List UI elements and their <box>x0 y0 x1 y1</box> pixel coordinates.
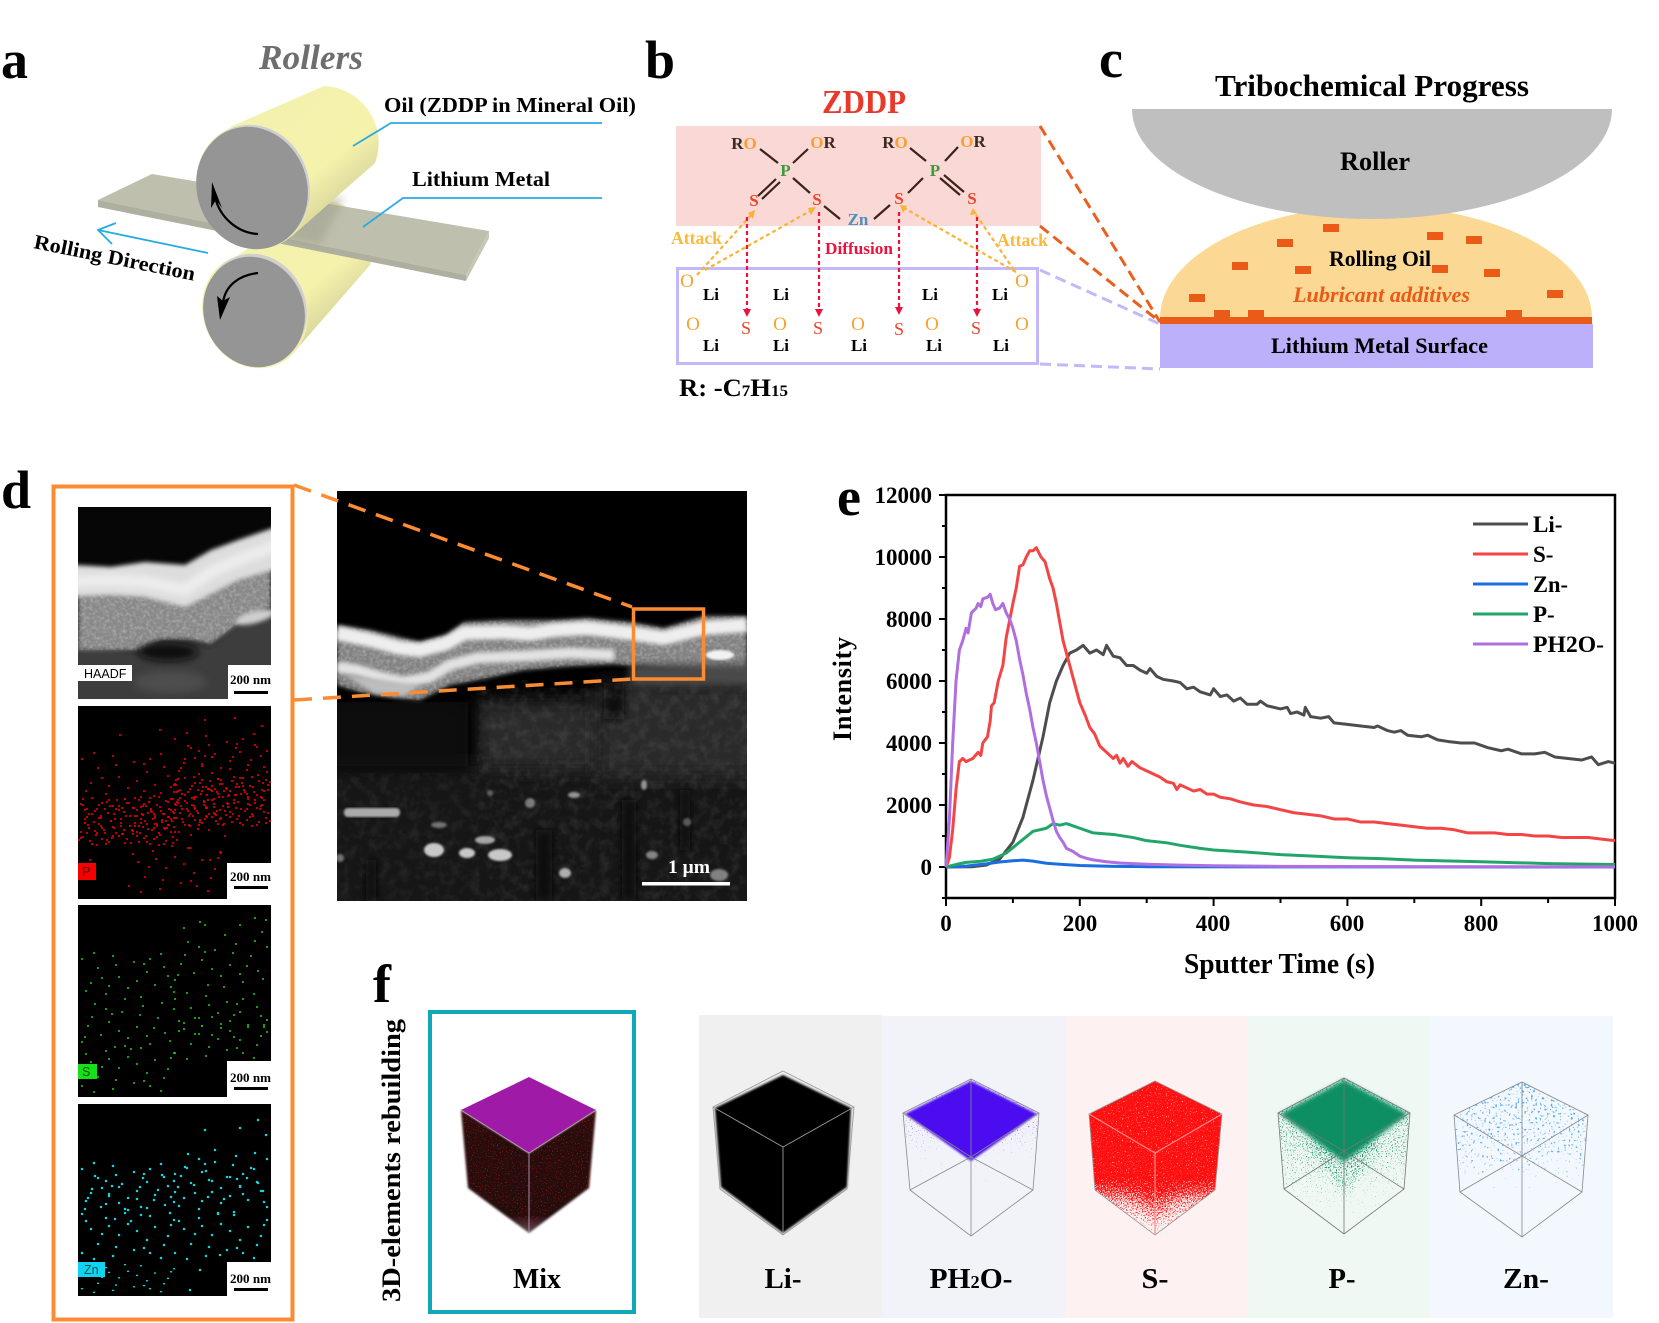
side title: 3D-elements rebuilding <box>377 1019 406 1302</box>
attack arrows <box>697 205 1016 275</box>
rotation arrow: upper roller <box>211 182 258 234</box>
molecule atoms: OR <box>960 132 986 151</box>
curve: PH2O- <box>946 594 1615 867</box>
lithium surface atoms: Li <box>926 336 942 355</box>
heading: Rollers: Rollers <box>258 38 363 77</box>
y axis title: Intensity <box>828 637 857 741</box>
callout: oil <box>353 93 636 146</box>
y axis labels: 6000 <box>886 669 932 694</box>
lithium surface atoms: O <box>925 314 939 335</box>
lithium surface atoms: O <box>851 314 865 335</box>
additives label: Lubricant additives <box>1292 282 1470 307</box>
HAADF image <box>78 507 271 699</box>
lithium surface atoms <box>680 271 1029 355</box>
panel label e: e <box>837 467 861 527</box>
PH2O cube <box>903 1079 1039 1236</box>
Li cube <box>713 1071 854 1235</box>
P map: 200 nm <box>230 870 272 884</box>
tribofilm <box>1160 317 1592 324</box>
x axis title: Sputter Time (s) <box>1184 949 1375 980</box>
diffusion arrows <box>743 212 981 317</box>
legend: Li- <box>1533 512 1562 537</box>
surface label: Lithium Metal Surface <box>1271 333 1488 358</box>
zoom dashes b to c <box>1040 126 1160 369</box>
molecule atoms: P <box>930 161 940 180</box>
P map <box>78 706 272 900</box>
HAADF tag <box>78 665 132 681</box>
lithium surface atoms: Li <box>773 336 789 355</box>
x axis labels: 200 <box>1063 911 1097 936</box>
lithium surface atoms: Li <box>703 336 719 355</box>
callout: lithium metal <box>363 167 602 227</box>
orange frame <box>54 486 292 1320</box>
P label: P- <box>1328 1263 1356 1295</box>
Zn cube <box>1454 1082 1588 1237</box>
roller <box>1132 109 1612 219</box>
lithium surface atoms: Li <box>851 336 867 355</box>
x axis labels: 400 <box>1196 911 1230 936</box>
molecule atoms: OR <box>810 133 836 152</box>
panel c: tribochemical progress <box>1099 29 1612 368</box>
Zn map: Zn <box>84 1263 99 1277</box>
P cube <box>1278 1078 1410 1234</box>
molecule atoms: S <box>894 189 904 208</box>
attack labels: Attack <box>997 230 1048 250</box>
molecule atoms: P <box>780 161 791 180</box>
panel a: rolling schematic <box>1 30 636 384</box>
callout: lithium metal: Lithium Metal <box>412 167 550 191</box>
formula R: R: -C7H15 <box>679 375 788 402</box>
y axis labels: 12000 <box>874 483 932 508</box>
y axis labels: 4000 <box>886 731 932 756</box>
lithium surface atoms: S <box>741 318 751 338</box>
lithium surface atoms: Li <box>993 336 1009 355</box>
lithium metal surface <box>1160 324 1593 368</box>
y axis labels: 8000 <box>886 607 932 632</box>
attack labels <box>671 228 1048 250</box>
Mix cube <box>461 1077 596 1233</box>
curve: P- <box>946 824 1615 867</box>
arrow: rolling direction: Rolling Direction <box>32 231 198 286</box>
zoom dashes <box>294 485 632 700</box>
curve: Zn- <box>946 860 1615 867</box>
P map: P <box>82 865 90 879</box>
callout: oil: Oil (ZDDP in Mineral Oil) <box>384 93 636 117</box>
lithium surface box <box>678 268 1038 364</box>
Mix frame <box>430 1012 634 1312</box>
roller label: Roller <box>1340 147 1410 176</box>
HAADF scale bar <box>228 665 272 700</box>
lithium surface atoms: O <box>773 314 787 335</box>
S map: S <box>82 1065 90 1079</box>
lithium surface atoms: Li <box>773 285 789 304</box>
panel label d: d <box>1 460 31 520</box>
legend <box>1473 512 1604 657</box>
diffusion arrows: Diffusion <box>825 239 894 258</box>
Mix label: Mix <box>513 1263 561 1295</box>
lithium surface atoms: O <box>686 314 700 335</box>
molecule atoms: S <box>749 191 759 210</box>
upper roller <box>179 86 379 265</box>
lithium surface atoms: Li <box>922 285 938 304</box>
y axis labels: 2000 <box>886 793 932 818</box>
panel f: 3D element rebuilding <box>373 954 1613 1318</box>
data curves <box>946 548 1615 867</box>
Zn map: 200 nm <box>230 1272 272 1286</box>
HAADF scale bar: 200 nm <box>230 673 272 687</box>
Zn map <box>78 1104 272 1297</box>
curve: S- <box>946 548 1615 867</box>
main STEM image <box>337 491 747 901</box>
lithium metal strip <box>98 174 489 281</box>
panel e: depth profile chart <box>828 467 1638 980</box>
lithium surface atoms: Li <box>703 285 719 304</box>
main image scale bar: 1 μm <box>668 857 710 878</box>
attack labels: Attack <box>671 228 722 248</box>
lithium surface atoms: S <box>813 318 823 338</box>
zoom box on main image <box>634 609 704 679</box>
panel d: electron microscopy <box>1 460 780 1320</box>
y axis labels <box>874 483 932 880</box>
lithium surface atoms: O <box>680 271 694 292</box>
HAADF tag: HAADF <box>84 667 127 681</box>
Li label: Li- <box>764 1263 802 1295</box>
x axis labels: 600 <box>1330 911 1364 936</box>
x axis labels: 0 <box>940 911 952 936</box>
tick marks <box>939 495 1615 906</box>
rotation arrow: lower roller <box>217 273 258 320</box>
oil label: Rolling Oil <box>1329 246 1431 271</box>
lithium surface atoms: O <box>1015 271 1029 292</box>
x axis labels <box>940 911 1638 936</box>
y axis labels: 10000 <box>874 545 932 570</box>
rolling oil dome <box>1160 206 1592 318</box>
molecule atoms: S <box>967 189 977 208</box>
PH2O label: PH2O- <box>930 1263 1012 1295</box>
S cube <box>1089 1081 1222 1235</box>
legend: PH2O- <box>1533 632 1604 657</box>
panel label f: f <box>373 954 392 1014</box>
heading: ZDDP: ZDDP <box>822 84 906 121</box>
legend: P- <box>1533 602 1555 627</box>
S map <box>78 905 272 1098</box>
lithium surface atoms: S <box>971 318 981 338</box>
axes frame <box>946 495 1615 898</box>
panel b: ZDDP reaction <box>645 30 1160 402</box>
molecule atoms: RO <box>882 133 908 152</box>
panel label b: b <box>645 30 675 90</box>
molecule bonds <box>758 147 964 219</box>
curve: Li- <box>946 645 1615 867</box>
lithium surface atoms: Li <box>992 285 1008 304</box>
heading: Tribochemical Progress <box>1215 68 1529 103</box>
ZDDP molecule box <box>676 126 1041 226</box>
molecule atoms <box>731 132 986 229</box>
x axis labels: 800 <box>1464 911 1498 936</box>
lithium surface atoms: S <box>894 319 904 339</box>
S map: 200 nm <box>230 1071 272 1085</box>
x axis labels: 1000 <box>1592 911 1638 936</box>
additive particles <box>1189 224 1563 318</box>
legend: Zn- <box>1533 572 1568 597</box>
molecule atoms: Zn <box>848 210 869 229</box>
element tiles <box>699 1015 1613 1318</box>
legend: S- <box>1533 542 1553 567</box>
panel label c: c <box>1099 29 1123 89</box>
lithium surface atoms: O <box>1015 314 1029 335</box>
Zn label: Zn- <box>1503 1263 1549 1295</box>
panel label a: a <box>1 30 28 90</box>
main image scale bar <box>642 857 730 886</box>
y axis labels: 0 <box>920 855 932 880</box>
lower roller <box>185 200 372 384</box>
molecule atoms: RO <box>731 134 757 153</box>
S label: S- <box>1142 1263 1168 1295</box>
molecule atoms: S <box>812 190 822 209</box>
